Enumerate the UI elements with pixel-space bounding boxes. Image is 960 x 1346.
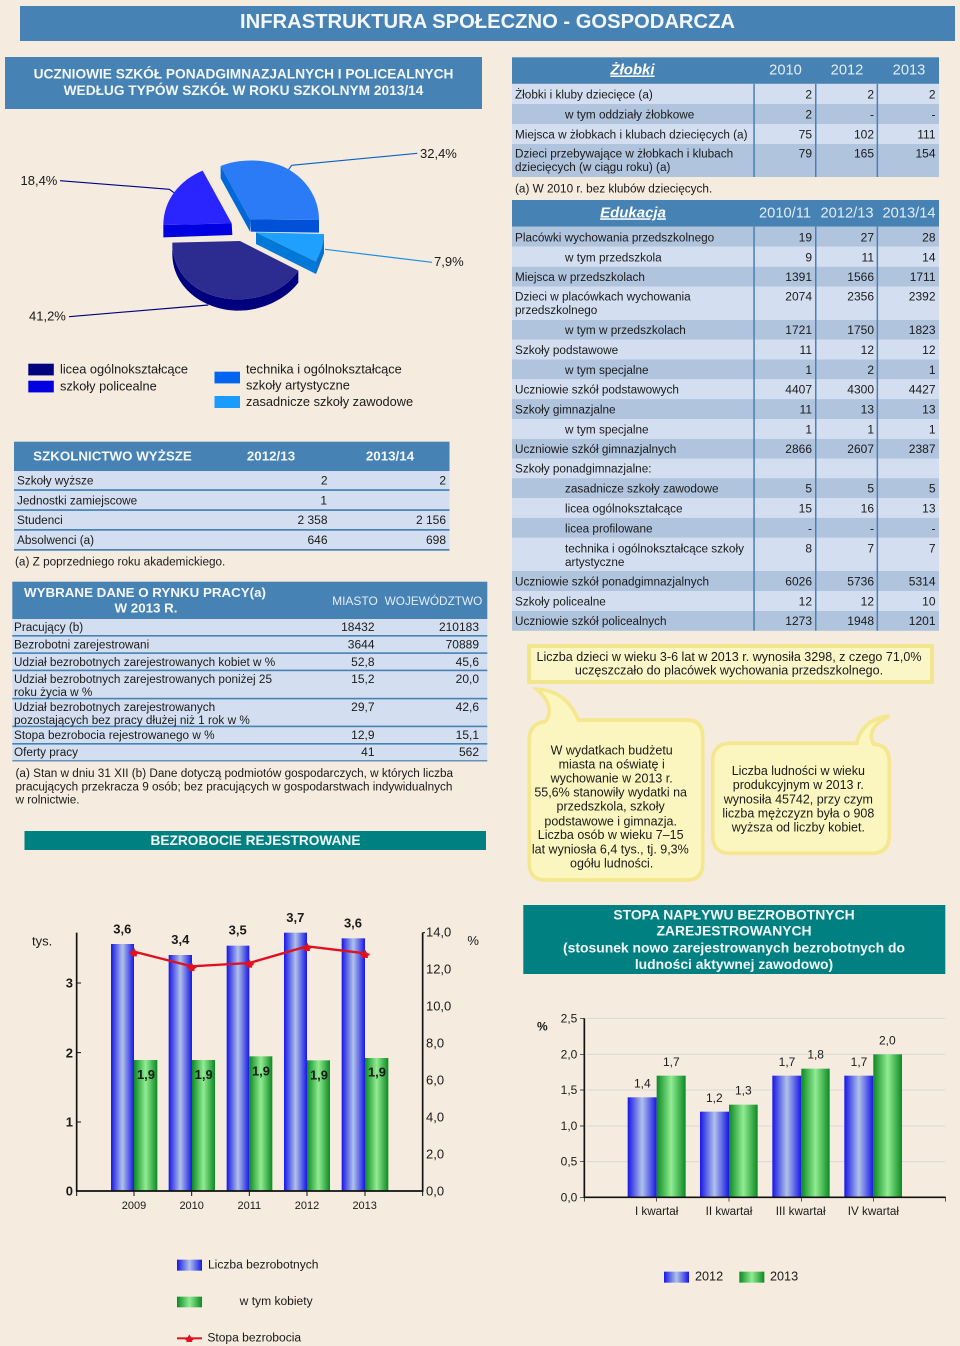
y axis labels: 2,0 — [561, 1047, 578, 1061]
quarter labels: II kwartał — [706, 1205, 753, 1218]
callout: education budget: lat wyniosła 6,4 tys., tj. 9,3% — [532, 842, 689, 856]
table header: labour market — [12, 582, 487, 619]
table rows: nursery: 75 — [799, 127, 812, 141]
footnote: labour market: pracujących przekracza 9 osób; bez pracujących w gospodarstwach indywidualnych — [16, 780, 452, 794]
table rows: education: Uczniowie szkół ponadgimnazjalnych — [515, 575, 709, 588]
table rows: education: przedszkolnego — [515, 304, 598, 317]
legend: unemployment chart — [177, 1258, 318, 1345]
heading: inflow rate of unemployed: (stosunek nowo zarejestrowanych bezrobotnych do — [563, 939, 905, 955]
table rows: education: 10 — [922, 594, 936, 608]
table rows: education: Uczniowie szkół podstawowych — [515, 384, 679, 397]
table rows: education: 1750 — [847, 323, 874, 337]
table rows: higher education: Absolwenci (a) — [17, 534, 94, 547]
table rows: education: 12 — [799, 594, 812, 608]
callout: working-age population: liczba mężczyzn była o 908 — [722, 806, 874, 820]
bar value labels: 3,7 — [286, 910, 304, 925]
table rows: higher education: 698 — [426, 533, 446, 547]
callout: education budget: 55,6% stanowiły wydatki na — [534, 786, 687, 800]
heading: inflow rate of unemployed — [523, 905, 945, 974]
bar value labels: 3,6 — [344, 916, 362, 931]
footnote: labour market: (a) Stan w dniu 31 XII (b) Dane dotyczą podmiotów gospodarczych, w których liczba — [16, 767, 454, 780]
heading: inflow rate of unemployed: STOPA NAPŁYWU BEZROBOTNYCH — [613, 906, 855, 922]
table rows: higher education: 2 358 — [297, 513, 328, 527]
table header: higher education: 2012/13 — [247, 449, 295, 464]
callout: children aged 3-6 — [529, 646, 932, 682]
table header: nursery — [512, 57, 939, 84]
bar value labels: 1,8 — [807, 1048, 824, 1062]
table rows: education: 1 — [805, 422, 812, 436]
right axis labels: 0,0 — [426, 1183, 444, 1198]
table rows: education: 11 — [862, 251, 874, 265]
table rows: education: 11 — [800, 402, 812, 416]
table rows: education: 8 — [805, 541, 812, 555]
table rows: nursery: 154 — [915, 147, 936, 161]
table rows: education: 5314 — [909, 574, 936, 588]
legend: unemployment chart: w tym kobiety — [239, 1294, 313, 1308]
table rows: nursery: Miejsca w żłobkach i klubach dziecięcych (a) — [515, 128, 748, 141]
table rows: education: 1391 — [785, 270, 812, 284]
heading: students by school type: WEDŁUG TYPÓW SZKÓŁ W ROKU SZKOLNYM 2013/14 — [64, 83, 424, 98]
table rows: labour market: 12,9 — [351, 728, 375, 742]
table rows: nursery: 111 — [917, 127, 936, 141]
table header: labour market: WOJEWÓDZTWO — [385, 594, 482, 608]
table rows: education: technika i ogólnokształcące szkoły — [565, 542, 744, 555]
table rows: nursery: dziecięcych (w ciągu roku) (a) — [515, 161, 670, 174]
table header: labour market: W 2013 R. — [114, 600, 178, 616]
table rows: nursery: 2 — [867, 87, 874, 101]
table rows: education: 1823 — [909, 323, 936, 337]
panel: nursery table — [512, 57, 939, 195]
table rows: higher education: 2 156 — [416, 513, 446, 527]
year labels: 2009 — [122, 1200, 146, 1212]
bar value labels: 1,9 — [310, 1067, 328, 1082]
year labels — [122, 1200, 377, 1212]
table rows: education: 19 — [799, 231, 812, 245]
table rows: higher education: Jednostki zamiejscowe — [17, 494, 138, 507]
table rows: education: 2607 — [847, 442, 874, 456]
table rows: education: 5 — [929, 482, 936, 496]
left axis labels — [32, 934, 73, 1198]
pie legend: licea ogólnokształcące — [60, 362, 188, 376]
table header: nursery: Żłobki — [609, 62, 655, 78]
right axis labels: 6,0 — [426, 1072, 444, 1087]
left axis labels: 1 — [66, 1115, 73, 1130]
bar value labels: 1,4 — [634, 1077, 651, 1091]
table rows: education: 14 — [922, 251, 936, 265]
unit label: % — [537, 1020, 548, 1034]
pie value labels: 41,2% — [29, 308, 66, 324]
y axis labels: 2,5 — [561, 1011, 578, 1025]
table rows: education: 7 — [867, 541, 874, 555]
left axis labels: 0 — [66, 1183, 73, 1198]
bar value labels: 1,9 — [137, 1067, 155, 1082]
year labels: 2011 — [238, 1200, 261, 1212]
table header: education: 2013/14 — [882, 205, 936, 221]
bar value labels: 3,6 — [113, 921, 131, 936]
table rows: nursery: 2 — [805, 107, 812, 121]
table rows: education: 2387 — [909, 442, 936, 456]
table header: education: 2010/11 — [759, 205, 811, 221]
table rows: education: 6026 — [785, 574, 812, 588]
table rows: nursery: - — [932, 107, 936, 121]
table rows: education: 2866 — [785, 442, 812, 456]
pie slice: technika 32,4% — [221, 161, 319, 233]
pie legend: szkoły artystyczne — [246, 378, 350, 392]
table header: higher education — [14, 442, 450, 471]
table rows: higher education: Studenci — [17, 514, 63, 527]
table rows: education: 1 — [929, 422, 936, 436]
panel: labour market table — [12, 582, 487, 806]
bar value labels: 1,2 — [706, 1091, 723, 1105]
legend: inflow chart: 2013 — [770, 1270, 798, 1284]
axes — [77, 933, 425, 1196]
title: INFRASTRUKTURA SPOŁECZNO - GOSPODARCZA — [240, 11, 735, 33]
table rows: education: Szkoły podstawowe — [515, 344, 619, 357]
bars: women — [134, 1056, 388, 1191]
table rows: labour market: 20,0 — [456, 672, 479, 686]
table rows: labour market: 15,2 — [351, 672, 375, 686]
right axis labels: 14,0 — [426, 925, 451, 940]
table header: higher education: 2013/14 — [366, 449, 415, 464]
pie legend: zasadnicze szkoły zawodowe — [246, 394, 413, 409]
table rows: labour market: Bezrobotni zarejestrowani — [14, 638, 149, 652]
right axis labels: 8,0 — [426, 1036, 444, 1051]
bars: 2012 — [628, 1076, 873, 1197]
chart: inflow rate by quarter — [537, 1011, 946, 1284]
table rows: education: 7 — [929, 541, 936, 555]
table rows: labour market: 3644 — [348, 638, 375, 652]
table rows: education: 13 — [922, 501, 936, 515]
table rows: labour market: 70889 — [446, 638, 479, 652]
callout: working-age population: wynosiła 45742, przy czym — [723, 792, 873, 806]
right axis labels: % — [467, 933, 479, 948]
callout: children aged 3-6: uczęszczało do placówek wychowania przedszkolnego. — [575, 664, 883, 678]
callout: working-age population: wyższa od liczby kobiet. — [731, 820, 865, 834]
table rows: labour market: 562 — [459, 745, 479, 759]
table rows: labour market: 41 — [361, 745, 375, 759]
table rows: higher education: 2 — [321, 474, 328, 488]
table rows: nursery: 2 — [805, 87, 812, 101]
bar value labels: 3,5 — [229, 923, 247, 938]
table header: nursery: 2013 — [893, 62, 925, 78]
y axis labels: 1,5 — [561, 1083, 578, 1097]
heading: registered unemployment: BEZROBOCIE REJESTROWANE — [151, 833, 360, 848]
table rows: education: - — [932, 521, 936, 535]
table rows: labour market: 15,1 — [456, 728, 479, 742]
table rows: education: 4300 — [847, 383, 874, 397]
quarter labels — [635, 1205, 899, 1218]
table rows: education: Szkoły policealne — [515, 595, 606, 608]
quarter labels: I kwartał — [635, 1205, 679, 1218]
table rows: labour market: 29,7 — [351, 700, 375, 714]
table rows: education: 28 — [922, 231, 936, 245]
legend: unemployment chart: Stopa bezrobocia — [207, 1331, 301, 1345]
table rows: labour market: Stopa bezrobocia rejestrowanego w % — [14, 729, 215, 742]
table rows: labour market: pozostających bez pracy dłużej niż 1 rok w % — [14, 714, 250, 727]
table rows: education: 1566 — [847, 270, 874, 284]
table rows: labour market: Udział bezrobotnych zarejestrowanych poniżej 25 — [14, 673, 272, 686]
callout: education budget: wychowanie w 2013 r. — [550, 772, 673, 786]
table rows: nursery: 2 — [929, 87, 936, 101]
callout: working-age population — [713, 716, 889, 853]
table rows: education: 1721 — [785, 323, 812, 337]
table rows: education: 12 — [861, 594, 874, 608]
callout: education budget: podstawowe i gimnazja. — [544, 814, 677, 828]
callout: education budget: ogółu ludności. — [570, 856, 653, 870]
table rows: labour market: 52,8 — [351, 655, 375, 669]
callout: education budget: W wydatkach budżetu — [551, 743, 673, 757]
table header: nursery: 2010 — [769, 62, 802, 78]
table rows: education: 12 — [861, 343, 874, 357]
table rows: education: 1 — [805, 363, 812, 377]
legend: inflow chart: 2012 — [695, 1270, 723, 1284]
table rows: higher education: 646 — [307, 533, 328, 547]
axes — [580, 1018, 946, 1202]
table rows: education: 9 — [805, 251, 812, 265]
year labels: 2010 — [179, 1200, 204, 1212]
y axis labels — [561, 1011, 578, 1204]
bar value labels — [113, 910, 386, 1082]
table rows: education: 1201 — [909, 614, 936, 628]
table rows: education: zasadnicze szkoły zawodowe — [565, 483, 719, 496]
table rows: labour market: 18432 — [341, 620, 375, 634]
table rows: education: 5736 — [847, 574, 874, 588]
quarter labels: III kwartał — [776, 1205, 826, 1218]
table rows: labour market: roku życia w % — [14, 686, 93, 699]
bar value labels: 1,9 — [252, 1063, 270, 1078]
table rows: education: Szkoły gimnazjalne — [515, 403, 616, 416]
table rows: nursery — [512, 84, 939, 177]
right axis labels: 12,0 — [426, 962, 451, 977]
table rows: education: - — [870, 521, 874, 535]
table rows: labour market: Udział bezrobotnych zarejestrowanych — [14, 701, 215, 714]
table rows: education: 5 — [805, 482, 812, 496]
table rows: education: 15 — [799, 501, 812, 515]
callout: working-age population: Liczba ludności w wieku — [732, 764, 865, 778]
callout: working-age population: produkcyjnym w 2013 r. — [733, 778, 864, 792]
left axis labels: 2 — [66, 1045, 73, 1060]
table rows: higher education: 2 — [439, 474, 446, 488]
table header: labour market: MIASTO — [332, 594, 378, 608]
left axis labels: tys. — [32, 934, 52, 949]
table rows: education: Szkoły ponadgimnazjalne: — [515, 463, 652, 476]
table rows: education: 1 — [867, 422, 874, 436]
table header: labour market: WYBRANE DANE O RYNKU PRACY(a) — [24, 585, 266, 600]
table rows: education: 12 — [922, 343, 936, 357]
table rows: higher education — [14, 471, 450, 551]
rate line — [129, 942, 370, 971]
table rows: labour market: Pracujący (b) — [14, 621, 83, 634]
table rows: nursery: w tym oddziały żłobkowe — [564, 108, 695, 121]
footnote: higher education: (a) Z poprzedniego roku akademickiego. — [15, 556, 225, 568]
table rows: education: w tym przedszkola — [564, 252, 662, 265]
table header: education: Edukacja — [600, 204, 666, 221]
table rows: nursery: 102 — [854, 127, 874, 141]
panel: higher education table — [14, 442, 450, 568]
pie chart: school types — [20, 146, 464, 324]
bars: 2013 — [657, 1054, 902, 1197]
table rows: education: 4427 — [909, 383, 936, 397]
table rows: education: 2356 — [847, 290, 874, 304]
right axis labels: 4,0 — [426, 1109, 444, 1124]
table rows: education — [512, 227, 939, 631]
table header: education — [512, 200, 939, 227]
bar value labels: 3,4 — [171, 932, 190, 947]
table rows: education: Miejsca w przedszkolach — [515, 271, 645, 284]
table rows: labour market: 42,6 — [456, 700, 479, 714]
table rows: education: w tym specjalne — [564, 364, 649, 377]
pie slice: szkoły policealne 18,4% — [163, 171, 232, 237]
table rows: education: w tym w przedszkolach — [564, 324, 686, 337]
table rows: education: 2392 — [909, 290, 936, 304]
right axis labels: 2,0 — [426, 1146, 444, 1161]
callout: children aged 3-6: Liczba dzieci w wieku 3-6 lat w 2013 r. wynosiła 3298, z czego 71,0% — [537, 650, 921, 664]
table rows: education: 1 — [929, 363, 936, 377]
table rows: education: 11 — [800, 343, 812, 357]
table rows: education: licea ogólnokształcące — [565, 502, 683, 515]
year labels: 2013 — [352, 1200, 377, 1212]
table rows: education: 4407 — [785, 383, 812, 397]
pie legend: szkoły policealne — [60, 378, 157, 394]
table header: higher education: SZKOLNICTWO WYŻSZE — [33, 449, 192, 464]
left axis labels: 3 — [66, 976, 73, 991]
bar value labels: 1,7 — [851, 1055, 868, 1069]
table rows: labour market: Oferty pracy — [14, 746, 78, 759]
table rows: education: Uczniowie szkół policealnych — [515, 615, 667, 628]
panel: education table — [512, 200, 939, 631]
callout: education budget: miasta na oświatę i — [559, 757, 665, 771]
table rows: education: 27 — [861, 231, 874, 245]
table rows: education: 2 — [867, 363, 874, 377]
right axis labels — [426, 925, 479, 1198]
grid lines — [587, 1018, 945, 1162]
heading: inflow rate of unemployed: ZAREJESTROWANYCH — [656, 923, 812, 939]
table rows: labour market — [12, 619, 487, 761]
chart: registered unemployment bars and rate line — [32, 910, 479, 1345]
table rows: education: 5 — [867, 482, 874, 496]
right axis labels: 10,0 — [426, 999, 451, 1014]
bar value labels: 2,0 — [879, 1033, 896, 1047]
table rows: education: 2074 — [785, 290, 812, 304]
table rows: labour market: 45,6 — [456, 655, 479, 669]
table rows: education: licea profilowane — [565, 522, 653, 535]
table rows: higher education: 1 — [320, 493, 327, 507]
bar value labels — [634, 1033, 896, 1105]
table rows: education: Placówki wychowania przedszkolnego — [515, 232, 715, 245]
table rows: labour market: Udział bezrobotnych zarejestrowanych kobiet w % — [14, 656, 276, 669]
table rows: nursery: Dzieci przebywające w żłobkach i klubach — [515, 148, 733, 161]
pie slice: zasadnicze 7,9% — [256, 232, 324, 274]
footnote: nursery: (a) W 2010 r. bez klubów dziecięcych. — [515, 182, 712, 195]
table rows: nursery: - — [870, 107, 874, 121]
table rows: education: Dzieci w placówkach wychowania — [515, 290, 691, 304]
callout: education budget: Liczba osób w wieku 7–15 — [538, 828, 684, 842]
heading: inflow rate of unemployed: ludności aktywnej zawodowo) — [635, 956, 833, 972]
table rows: education: 1948 — [847, 614, 874, 628]
table rows: education: 13 — [922, 402, 936, 416]
year labels: 2012 — [295, 1200, 319, 1212]
legend: inflow chart — [664, 1270, 798, 1284]
table header: nursery: 2012 — [831, 62, 863, 78]
bar value labels: 1,3 — [735, 1084, 752, 1098]
y axis labels: 0,0 — [561, 1190, 578, 1204]
table rows: education: 16 — [861, 501, 874, 515]
footnote: labour market: w rolnictwie. — [14, 794, 80, 806]
table rows: labour market: 210183 — [439, 620, 479, 634]
table rows: nursery: 165 — [854, 147, 874, 161]
table rows: nursery: Żłobki i kluby dziecięce (a) — [515, 88, 653, 101]
legend: unemployment chart: Liczba bezrobotnych — [208, 1258, 318, 1272]
callout: education budget: przedszkola, szkoły — [557, 800, 666, 814]
pie legend — [28, 362, 413, 409]
pie slice: licea 41,2% — [172, 241, 298, 311]
table header: education: 2012/13 — [820, 205, 874, 221]
footnote: labour market — [14, 767, 454, 806]
bar value labels: 1,9 — [368, 1065, 386, 1080]
title — [20, 6, 955, 41]
bar value labels: 1,7 — [663, 1055, 680, 1069]
heading: students by school type: UCZNIOWIE SZKÓŁ PONADGIMNAZJALNYCH I POLICEALNYCH — [34, 66, 453, 82]
table rows: nursery: 79 — [799, 147, 812, 161]
heading: students by school type — [5, 57, 482, 109]
table rows: education: Uczniowie szkół gimnazjalnych — [515, 443, 676, 456]
bars: unemployed total — [111, 933, 365, 1191]
callout: education budget — [529, 689, 703, 880]
quarter labels: IV kwartał — [848, 1205, 899, 1218]
table rows: education: - — [808, 521, 812, 535]
table rows: education: 1711 — [910, 270, 936, 284]
heading: registered unemployment — [24, 831, 486, 850]
y axis labels: 1,0 — [561, 1119, 578, 1133]
table rows: education: w tym specjalne — [564, 423, 649, 436]
pie legend: technika i ogólnokształcące — [246, 362, 402, 376]
pie value labels: 7,9% — [434, 254, 464, 269]
table rows: higher education: Szkoły wyższe — [17, 474, 94, 488]
bar value labels: 1,7 — [779, 1055, 796, 1069]
y axis labels: 0,5 — [561, 1155, 578, 1169]
pie value labels: 32,4% — [420, 146, 457, 161]
table rows: education: 1273 — [785, 614, 812, 628]
pie value labels — [20, 146, 464, 324]
bar value labels: 1,9 — [195, 1067, 213, 1082]
table rows: education: 13 — [861, 402, 874, 416]
table rows: education: artystyczne — [565, 556, 625, 569]
pie value labels: 18,4% — [20, 173, 58, 188]
